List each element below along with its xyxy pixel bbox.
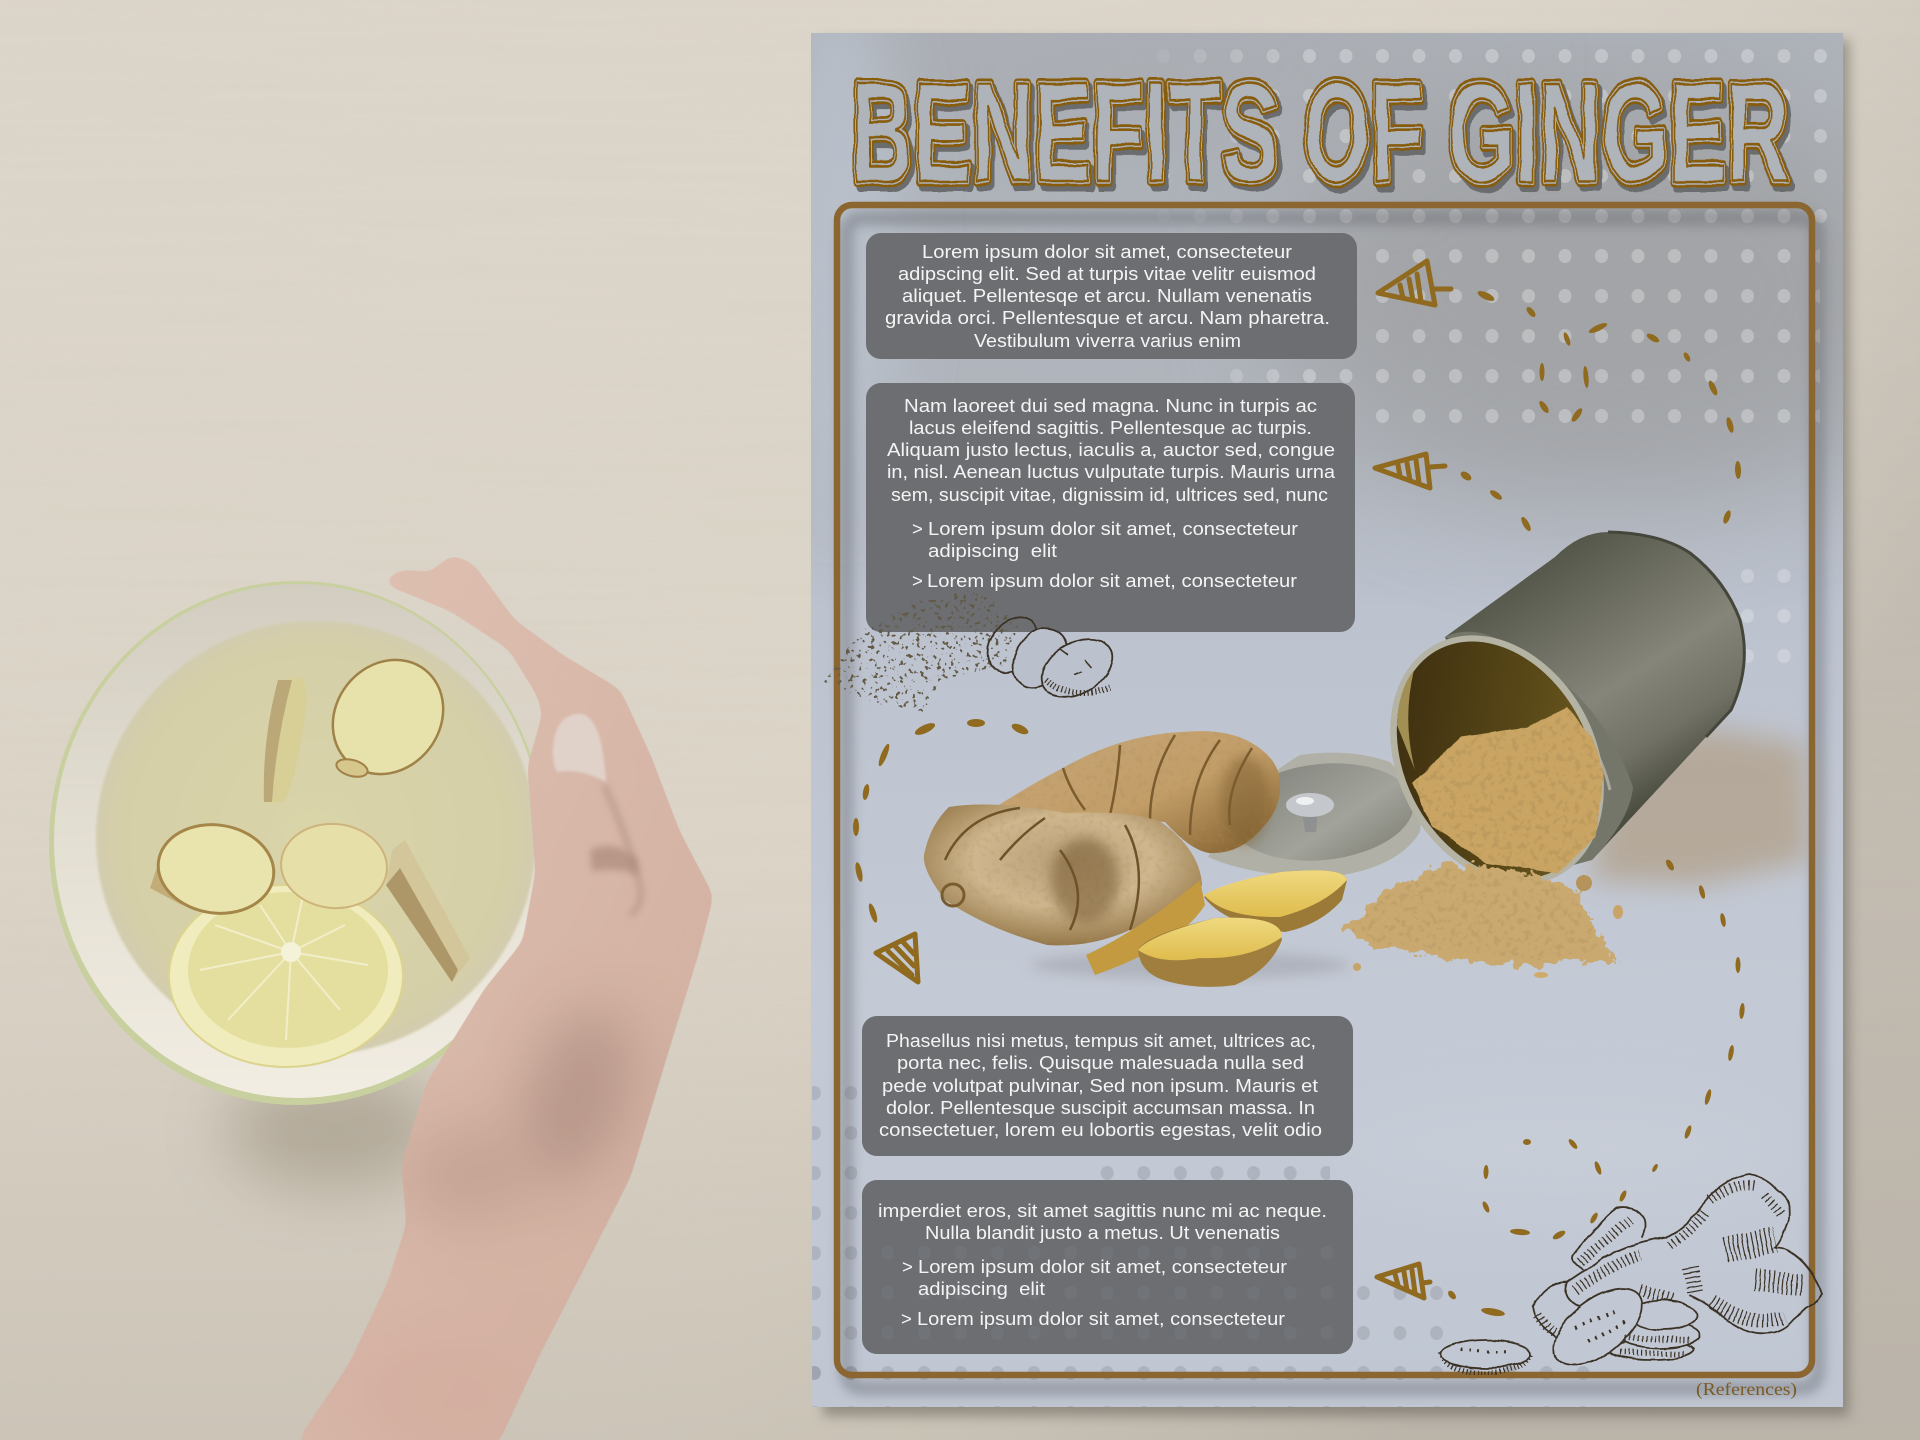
thumb details (553, 714, 641, 915)
text box 2: lacus eleifend sagittis. Pellentesque ac turpis. (909, 417, 1312, 438)
text box 2: > (912, 570, 923, 591)
tin cast shadow (1590, 730, 1810, 885)
sketch: ginger root illustration (1533, 1174, 1822, 1342)
text box 1: aliquet. Pellentesqe et arcu. Nullam venenatis (902, 285, 1312, 306)
ginger root front (924, 805, 1202, 945)
text box 2: Lorem ipsum dolor sit amet, consecteteur (928, 518, 1298, 539)
icon: arrow head 2 (1375, 454, 1445, 488)
tin opening (1348, 598, 1646, 922)
text box 3: consectetuer, lorem eu lobortis egestas, velit odio (879, 1119, 1322, 1140)
icon: arrow head 4 (1377, 1264, 1430, 1298)
text box 2 (866, 383, 1355, 632)
text box 4: adipiscing elit (918, 1278, 1045, 1299)
text box 4: > (901, 1308, 912, 1329)
tin lid (1208, 753, 1421, 876)
text box 3 (862, 1016, 1353, 1156)
root outline (1533, 1174, 1822, 1342)
sketched single disc (1441, 1340, 1532, 1373)
text box 3: dolor. Pellentesque suscipit accumsan massa. In (886, 1097, 1315, 1118)
poster shadow (823, 40, 1849, 1416)
text box 3: pede volutpat pulvinar, Sed non ipsum. Mauris et (882, 1075, 1318, 1096)
lemon slice (169, 885, 403, 1067)
sketched coin slices (1540, 1274, 1700, 1380)
text box 4: Lorem ipsum dolor sit amet, consecteteur (917, 1308, 1285, 1329)
ginger powder heap (1343, 863, 1623, 978)
text box 1: adipscing elit. Sed at turpis vitae velitr euismod (898, 263, 1316, 284)
text box 4 (862, 1180, 1353, 1354)
ginger root back (999, 731, 1280, 853)
photo: ginger root, powder and spilled tin (924, 532, 1810, 987)
text box 2: Aliquam justo lectus, iaculis a, auctor sed, congue (887, 439, 1335, 460)
icon: arrow head 3 (876, 934, 918, 982)
text box 4: imperdiet eros, sit amet sagittis nunc mi ac neque. (878, 1200, 1327, 1221)
fresh ginger slices (1086, 870, 1347, 987)
bowl shadow (225, 1070, 445, 1190)
text box 2: > (912, 518, 923, 539)
text box 2: sem, suscipit vitae, dignissim id, ultrices sed, nunc (891, 484, 1328, 505)
brown frame (837, 205, 1812, 1375)
text box 1: gravida orci. Pellentesque et arcu. Nam pharetra. (885, 307, 1330, 328)
text box 2: Nam laoreet dui sed magna. Nunc in turpis ac (904, 395, 1317, 416)
icon: arrow head 1 (1378, 261, 1451, 305)
text box 1: Vestibulum viverra varius enim (974, 330, 1241, 351)
root hatching (1537, 1185, 1805, 1335)
text box 2: in, nisl. Aenean luctus vulputate turpis. Mauris urna (887, 461, 1336, 482)
poster panel (811, 33, 1843, 1407)
references note: (References) (1696, 1379, 1797, 1400)
upper knob (1572, 1208, 1646, 1270)
sketch: ginger slices with speckled powder (824, 590, 1122, 712)
text box 3: Phasellus nisi metus, tempus sit amet, ultrices ac, (886, 1030, 1316, 1051)
frame shadow (846, 218, 1818, 1388)
metal tin body (1445, 532, 1744, 870)
hand (295, 555, 713, 1440)
ginger slices in tea (150, 638, 470, 982)
photo: bowl of ginger tea held by hand (49, 555, 713, 1440)
text box 2: Lorem ipsum dolor sit amet, consecteteur (927, 570, 1297, 591)
text box 4: Nulla blandit justo a metus. Ut venenatis (925, 1222, 1280, 1243)
text box 1: Lorem ipsum dolor sit amet, consecteteur (922, 241, 1292, 262)
tea bowl (49, 581, 545, 1105)
text box 1 (866, 233, 1357, 359)
text box 4: Lorem ipsum dolor sit amet, consecteteur (918, 1256, 1287, 1277)
powder speckles (824, 590, 1020, 712)
text box 3: porta nec, felis. Quisque malesuada nulla sed (897, 1052, 1304, 1073)
ginger powder in tin (1412, 707, 1604, 873)
dashed arrow paths (853, 289, 1745, 1318)
text box 4: > (902, 1256, 913, 1277)
sketched discs (978, 608, 1122, 709)
text box 2: adipiscing elit (928, 540, 1057, 561)
